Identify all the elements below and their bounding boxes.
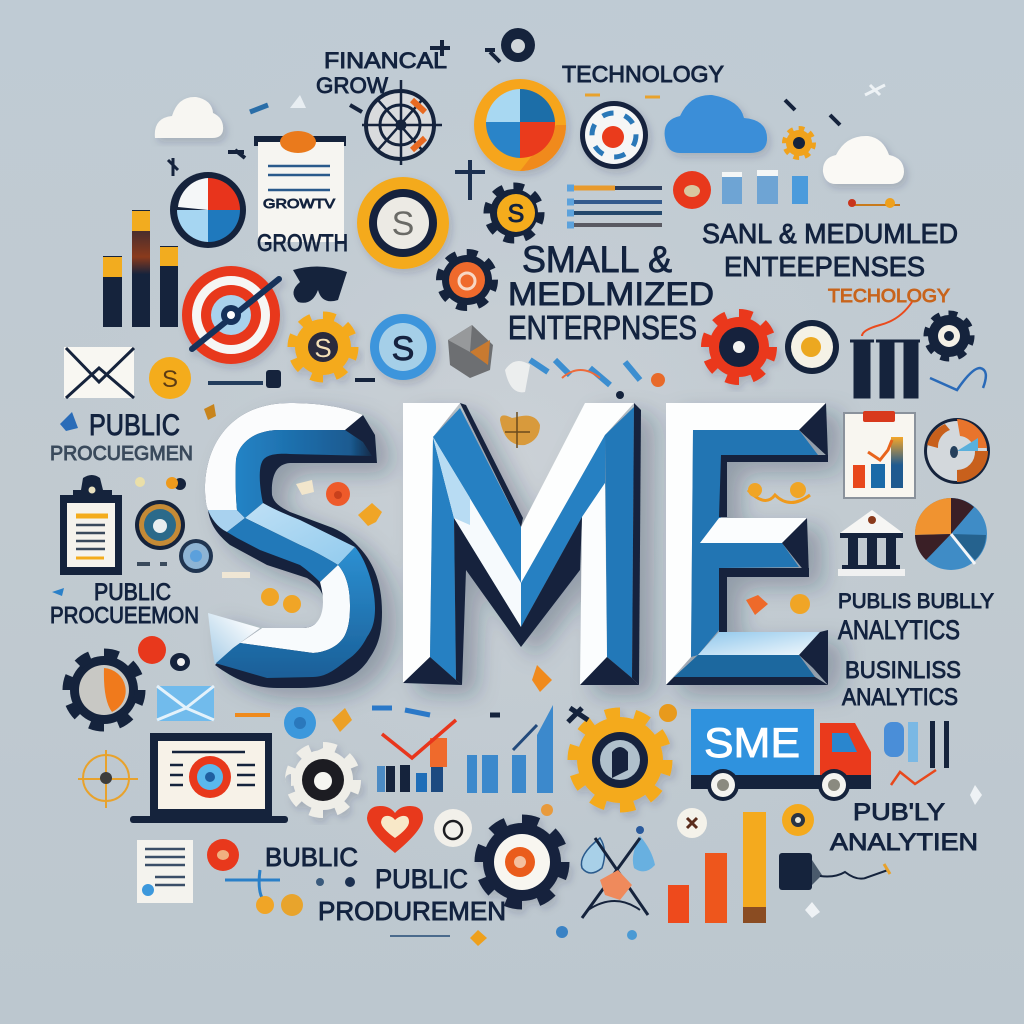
- icon: gold gear house: [575, 715, 665, 805]
- icon: ring gauge: [924, 418, 990, 484]
- icon: dark gear orange: [440, 253, 494, 307]
- icon: crosshair wheel: [362, 80, 442, 165]
- label: business analytics: ANALYTICS: [842, 684, 958, 711]
- icon: blue circle: [284, 707, 316, 739]
- heading: financial growth: [316, 48, 447, 98]
- icon: gold ring coin S: S: [392, 205, 414, 243]
- icon: red dot lower: [207, 839, 239, 871]
- letter E: [666, 403, 828, 685]
- label: business analytics: BUSINLISS: [845, 657, 961, 684]
- label: public analytics: PUBLIS BUBLLY: [838, 590, 994, 613]
- icon: blue S coin: [370, 314, 436, 380]
- icon: red and gold bars: [668, 812, 766, 923]
- main lettering: SME: [205, 403, 828, 688]
- label: public analytics: [838, 590, 994, 645]
- decorative scattered small marks: [168, 40, 982, 946]
- label: business analytics: [842, 657, 961, 711]
- icon: black emblem top: [501, 28, 535, 62]
- icon: quadrant pie left: [170, 172, 246, 248]
- icon: white button: [677, 808, 707, 838]
- heading: enterprises right: SANL & MEDUMLED: [702, 218, 958, 249]
- icon: plug with wire: [779, 853, 890, 890]
- heading: small and medium enterprises: ENTERPNSES: [508, 309, 697, 346]
- icon: medal ring: [135, 500, 185, 550]
- icon: dark gear S: [488, 187, 540, 239]
- icon: squiggle mark: [293, 266, 347, 303]
- label: public analytics lower: [830, 799, 978, 856]
- icon: gold ring coin S: [357, 177, 449, 269]
- icon: target with arrow: [182, 266, 280, 364]
- icon: white gear: [291, 748, 355, 812]
- icon: key bar: [208, 370, 281, 388]
- label: public procurement lower: [50, 579, 199, 628]
- icon: growth report document: GROWTH: [257, 230, 348, 257]
- icon: red gear: [707, 315, 771, 379]
- icon: red badge and dark blob: [138, 636, 190, 671]
- heading: small and medium enterprises: MEDLMIZED: [508, 276, 714, 312]
- icon: white cloud right: [823, 136, 904, 184]
- icon: envelope: [64, 347, 134, 398]
- icon: growth report document: [254, 131, 348, 257]
- heading: enterprises right: [702, 218, 958, 282]
- icon: gold coin S: S: [162, 366, 178, 393]
- icon: laptop with target: [130, 733, 288, 823]
- icon: bank building: [838, 510, 905, 576]
- heading: financial growth: GROW: [316, 73, 388, 98]
- icon: blue squiggle: [930, 368, 986, 390]
- icon: red dot: [673, 171, 711, 209]
- icon: SME delivery truck: [691, 709, 871, 801]
- icon: gold gear S: S: [314, 333, 332, 363]
- icon: ring coin: [785, 320, 839, 374]
- heading: financial growth: FINANCAL: [324, 48, 447, 73]
- icon: gold gear S: [293, 317, 353, 377]
- icon: blue S coin: S: [392, 330, 414, 368]
- label: public procurement upper: PROCUEGMEN: [50, 443, 193, 465]
- label: public procurement lower: PROCUEEMON: [50, 602, 199, 628]
- heading: small and medium enterprises: [508, 239, 714, 346]
- label: public analytics lower: ANALYTIEN: [830, 829, 978, 856]
- icon: bar chart left: [103, 210, 178, 327]
- icon: grey faceted gem: [448, 325, 493, 378]
- icon: small gold gear: [785, 129, 813, 157]
- icon: heart: [367, 806, 423, 853]
- icon: dark gear S: S: [508, 200, 524, 228]
- icon: blue stepped chart: [467, 705, 553, 793]
- heading: small and medium enterprises: SMALL &: [522, 239, 672, 280]
- icon: light blue envelope: [157, 686, 214, 721]
- label: public analytics: ANALYTICS: [838, 615, 960, 645]
- icon: pillars with arrow line: [850, 302, 920, 397]
- icon: large orange pie: [474, 79, 566, 171]
- icon: red chart with check: [377, 720, 456, 792]
- icon: small blue ring: [179, 539, 213, 573]
- icon: dark cog: [927, 314, 971, 358]
- label: public produrement: PRODUREMEN: [318, 896, 506, 926]
- label: orange technology: TECHOLOGY: [828, 286, 950, 306]
- label: public analytics lower: PUB'LY: [853, 799, 945, 826]
- icon: white cloud left: [155, 97, 223, 138]
- icon: chart card: [844, 411, 915, 498]
- icon: pie right: [915, 498, 987, 570]
- label: public procurement upper: PUBLIC: [89, 409, 180, 442]
- icon: dark gear left: [68, 654, 140, 726]
- icon: technology dial: [580, 101, 648, 169]
- icon: gold coin lower: [782, 804, 814, 836]
- letter S: [205, 403, 382, 688]
- label: public produrement: PUBLIC: [375, 864, 468, 894]
- icon: growth report document: GROWTV: [263, 196, 335, 211]
- icon: gold coin S: [149, 357, 191, 399]
- heading: technology: TECHNOLOGY: [562, 61, 724, 87]
- icon: small marks near clipboard: [52, 412, 186, 596]
- icon: dark gear orange center: [481, 821, 563, 903]
- icon: orange crosshair: [78, 750, 138, 808]
- icon: white ring: [434, 809, 472, 847]
- icon: small analytics bars: [884, 721, 949, 785]
- label: public procurement upper: [50, 409, 193, 465]
- icon: public clipboard: [60, 475, 122, 575]
- heading: enterprises right: ENTEEPENSES: [724, 251, 925, 282]
- icon: crossed drops: [581, 836, 655, 918]
- icon: blue columns: [722, 170, 808, 204]
- label: public procurement lower: PUBLIC: [94, 579, 171, 606]
- icon: blue cloud: [665, 95, 767, 153]
- label: bublic: BUBLIC: [265, 842, 358, 872]
- icon: SME delivery truck: SME: [704, 719, 800, 766]
- icon: report paper: [137, 840, 193, 903]
- icon: horizontal bars: [567, 188, 662, 225]
- label: public produrement: [318, 864, 506, 926]
- letter M: [403, 403, 641, 685]
